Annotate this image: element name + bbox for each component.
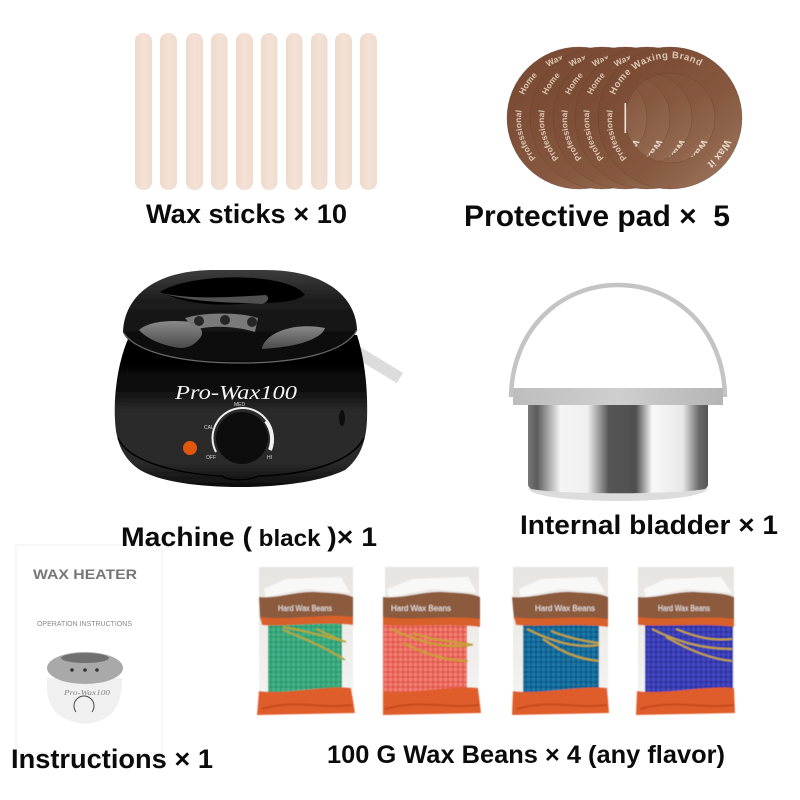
icon: protective pads: Home [565,74,582,94]
icon: protective pads: Professional [561,110,582,162]
icon: protective pads: Home Waxing Brand [609,52,703,94]
icon: protective pads: Professional [583,110,604,162]
machine dial: HI [267,455,272,461]
label: protective pad: Protective pad × 5 [464,200,730,233]
icon: protective pads: Wax [591,56,608,66]
icon: protective pads: Wax it [632,140,640,147]
label: internal bladder: Internal bladder × 1 [520,510,778,540]
icon: blue wax beans bag [512,567,609,715]
icon: red wax beans bag [383,567,481,715]
icon: blue wax beans bag: Hard Wax Beans [535,604,595,613]
icon: purple wax beans bag [636,567,735,715]
icon: red wax beans bag: Hard Wax Beans [391,604,451,613]
icon: protective pads: Wax it [691,140,708,157]
label: wax beans: 100 G Wax Beans × 4 (any flavor) [327,741,725,769]
icon: black wax machine [115,270,400,487]
icon: protective pads: Wax it [669,140,685,157]
label: wax sticks: Wax sticks × 10 [146,199,347,229]
icon: green wax beans bag [257,567,355,715]
machine brand text: Pro-Wax100 [174,382,297,404]
label: instructions: Instructions × 1 [11,744,213,774]
icon: protective pads: Professional [538,110,558,162]
icon: protective pads: Wax [568,56,585,66]
machine indicator light [183,441,197,455]
icon: protective pads [506,46,742,190]
machine dial [204,402,273,464]
icon: protective pads: Wax [545,56,562,66]
icon: protective pads: Wax it [646,140,663,157]
machine dial: CAL [204,425,214,431]
icon: wax sticks [135,33,377,190]
icon: purple wax beans bag: Hard Wax Beans [658,604,710,613]
panel: instructions booklet [16,545,162,753]
icon: protective pads: Home [519,74,536,94]
icon: protective pads: Professional [515,110,536,162]
machine dial: OFF [206,455,216,461]
booklet title: WAX HEATER [33,566,137,582]
icon: white machine [47,652,123,724]
booklet subtitle: OPERATION INSTRUCTIONS [37,619,132,628]
icon: internal bladder pot [511,285,725,501]
icon: protective pads: Professional [606,110,626,162]
label: machine: Machine ( black )× 1 [121,522,377,552]
icon: protective pads: Home [542,74,560,94]
icon: protective pads: Home [587,74,604,94]
icon: green wax beans bag: Hard Wax Beans [278,604,332,613]
machine dial: MED [234,402,246,408]
icon: white machine: Pro-Wax100 [63,689,111,697]
icon: protective pads: Wax it [707,140,732,168]
icon: protective pads: Wax [613,56,630,66]
